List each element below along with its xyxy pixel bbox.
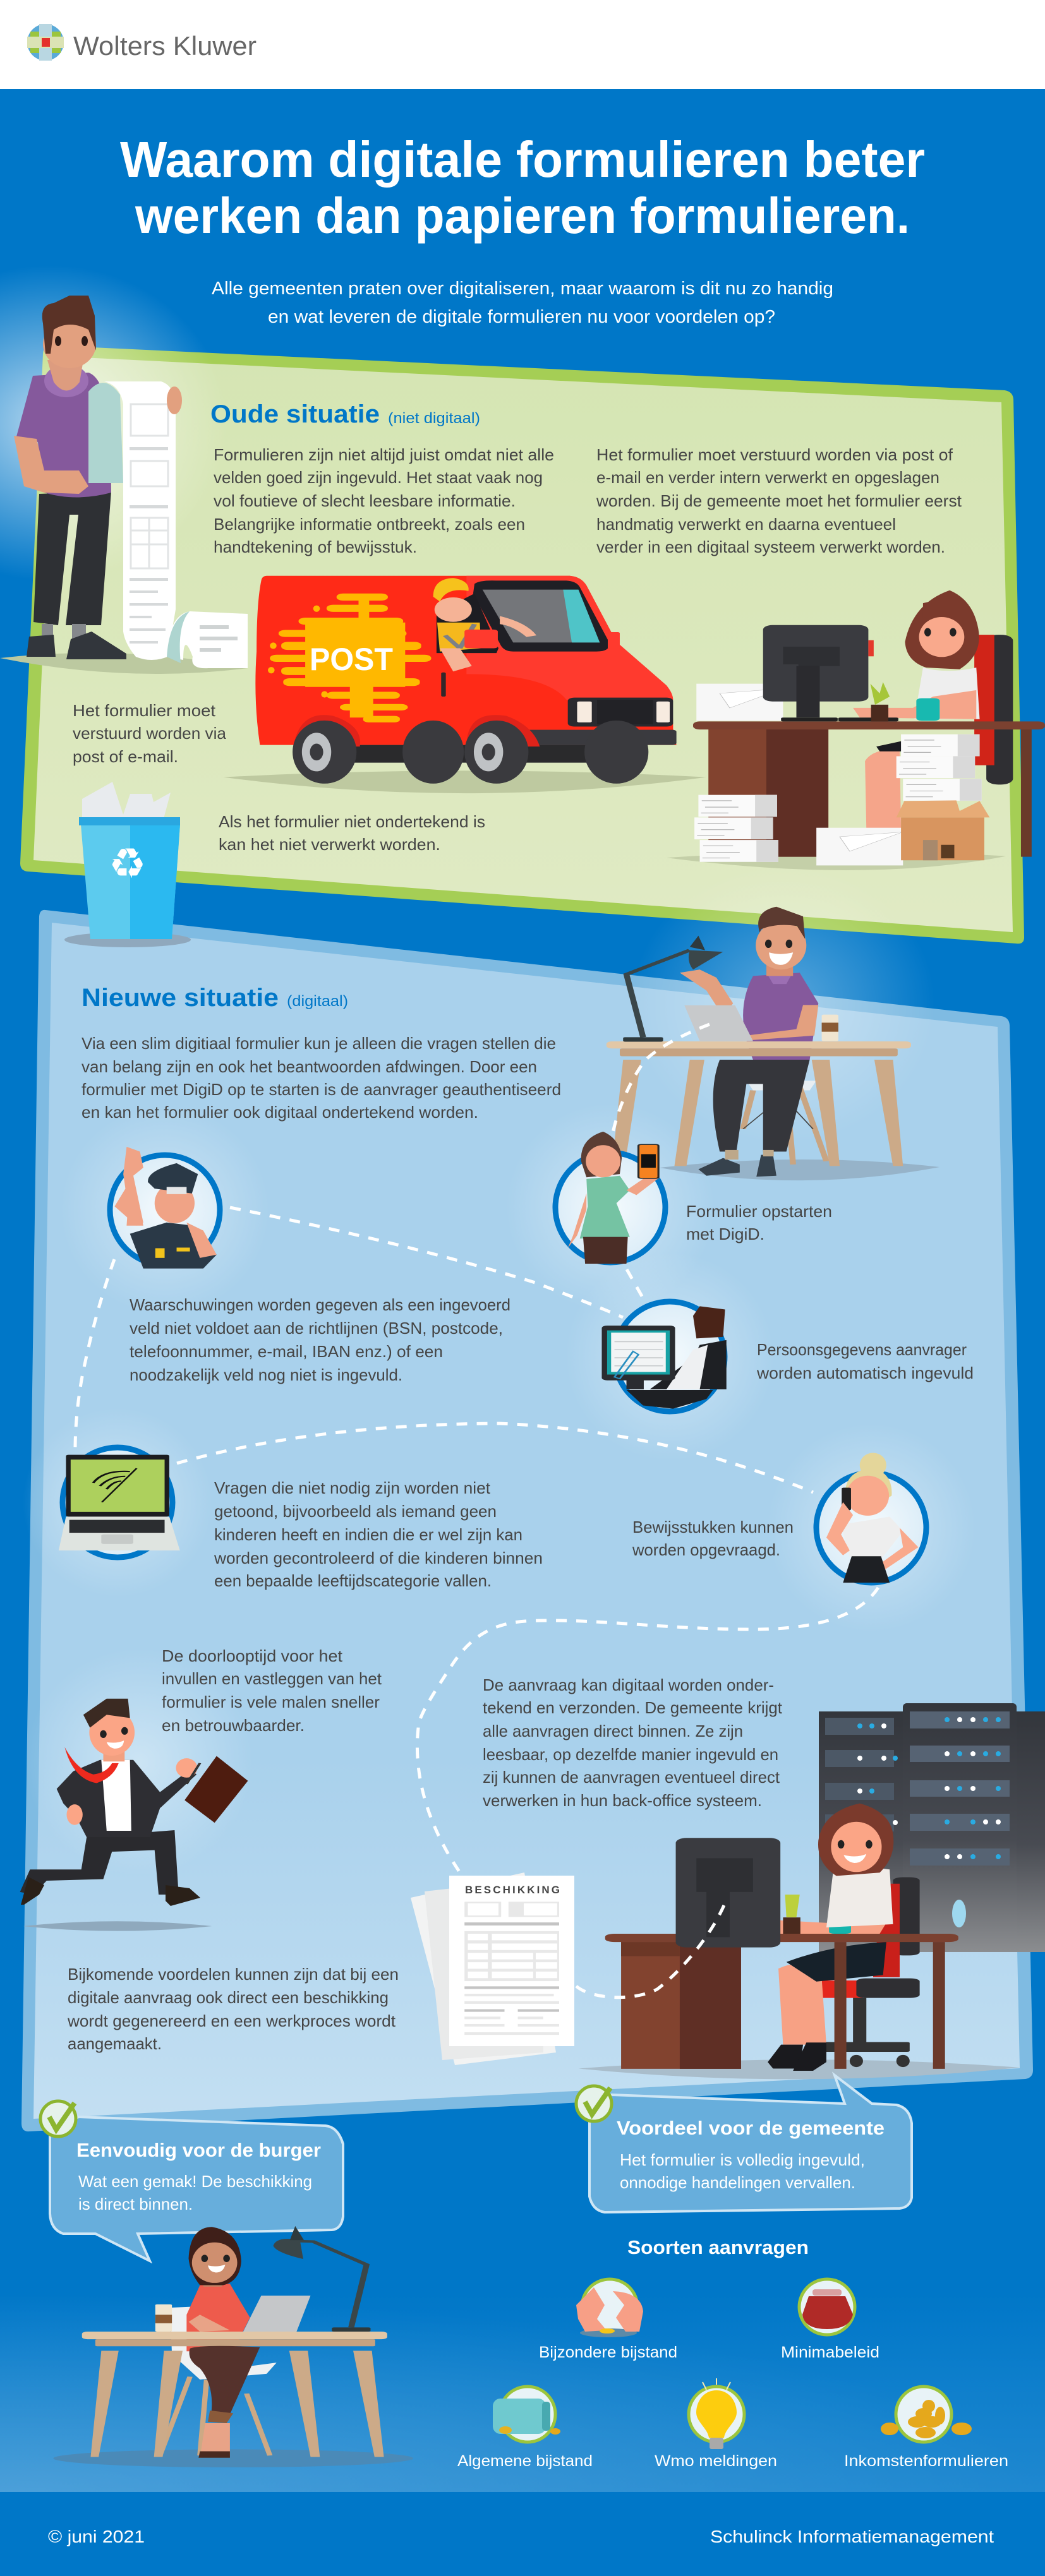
glow behind man with paper: [0, 265, 227, 581]
text: post of e-mail: verder in een digitaal systeem verwerkt worden.: [596, 537, 945, 556]
text: vragen niet getoond: [214, 1478, 543, 1590]
item: bijzondere bijstand: [539, 2279, 677, 2361]
text: bewijsstukken: worden opgevraagd.: [632, 1540, 780, 1559]
text: verstuurd via post of e-mail: [73, 701, 227, 766]
item: wmo meldingen: Wmo meldingen: [655, 2452, 777, 2470]
item: minimabeleid: [781, 2279, 879, 2361]
text: formulier opstarten: met DigiD.: [686, 1225, 764, 1243]
footer: © juni 2021: [48, 2527, 145, 2546]
text: formulieren niet juist: Belangrijke informatie ontbreekt, zoals een: [214, 515, 525, 534]
text: formulieren niet juist: Formulieren zijn niet altijd juist omdat niet alle: [214, 445, 554, 464]
text: doorlooptijd: [162, 1646, 382, 1735]
subtitle: [212, 279, 833, 327]
text: verstuurd via post of e-mail: Het formulier moet: [73, 701, 216, 720]
text: slim digitaal formulier: [82, 1034, 561, 1122]
heading: nieuwe situatie: (digitaal): [287, 993, 348, 1010]
halos behind step circles: [23, 1103, 976, 1876]
logo: Wolters Kluwer: Wolters Kluwer: [73, 31, 257, 61]
text: formulieren niet juist: velden goed zijn ingevuld. Het staat vaak nog: [214, 468, 543, 487]
title: werken dan papieren formulieren.: [135, 188, 910, 244]
text: vragen niet getoond: een bepaalde leeftijdscategorie vallen.: [214, 1571, 492, 1590]
icon: check badge burger: [40, 2101, 76, 2136]
icon: runner shoes: [21, 1877, 200, 1906]
glow behind man at desk: [632, 865, 935, 1143]
icon: recycle bin: [64, 782, 191, 947]
text: bewijsstukken: [632, 1518, 794, 1559]
item: wmo meldingen: [655, 2378, 777, 2470]
step circle: woman with phone: [555, 1132, 665, 1264]
text: doorlooptijd: De doorlooptijd voor het: [162, 1646, 343, 1665]
heading: oude situatie: [210, 400, 480, 428]
item: minimabeleid: Minimabeleid: [781, 2344, 879, 2361]
text: vragen niet getoond: Vragen die niet nodig zijn worden niet: [214, 1478, 491, 1497]
panel: nieuwe situatie: [21, 910, 1033, 2131]
illustration: server racks: [819, 1703, 1045, 1952]
text: waarschuwingen: noodzakelijk veld nog niet is ingevuld.: [130, 1365, 402, 1384]
subtitle: en wat leveren de digitale formulieren nu voor voordelen op?: [268, 307, 775, 327]
text: aanvraag digitaal: tekend en verzonden. De gemeente krijgt: [483, 1698, 783, 1717]
lower background gradient: [0, 2294, 1045, 2492]
callout: voordeel voor de gemeente: onnodige handelingen vervallen.: [620, 2173, 855, 2192]
icon: POST logo splash: [268, 594, 431, 722]
text: aanvraag digitaal: [483, 1675, 783, 1810]
text: doorlooptijd: en betrouwbaarder.: [162, 1716, 305, 1735]
text: aanvraag digitaal: leesbaar, op dezelfde manier ingevuld en: [483, 1745, 778, 1764]
callout: voordeel voor de gemeente: [589, 2075, 912, 2212]
icon: recycle bin: ♻: [109, 839, 146, 888]
shadow under runner: [23, 1921, 212, 1931]
item: inkomstenformulieren: Inkomstenformulieren: [844, 2452, 1008, 2470]
text: post of e-mail: handmatig verwerkt en daarna eventueel: [596, 515, 896, 534]
text: verstuurd via post of e-mail: post of e-mail.: [73, 747, 178, 766]
heading: oude situatie: Oude situatie: [210, 400, 380, 428]
item: algemene bijstand: Algemene bijstand: [457, 2452, 593, 2470]
callout: eenvoudig voor de burger: Wat een gemak! De beschikking: [78, 2172, 312, 2191]
text: niet ondertekend: kan het niet verwerkt worden.: [219, 835, 440, 854]
item: inkomstenformulieren: [844, 2387, 1008, 2470]
text: slim digitaal formulier: van belang zijn en ook het beantwoorden afdwingen. Door een: [82, 1057, 537, 1076]
illustration: running businessman: [20, 1699, 248, 1931]
footer: Schulinck Informatiemanagement: [710, 2527, 994, 2546]
icon: desk lamp: [623, 936, 723, 1041]
callout: voordeel voor de gemeente: Voordeel voor de gemeente: [617, 2117, 885, 2139]
footer: [0, 2492, 1045, 2576]
step circle: person at computer: [601, 1302, 727, 1411]
POST label on van: POST: [310, 642, 393, 677]
text: niet ondertekend: [219, 812, 485, 854]
text: post of e-mail: Het formulier moet verstuurd worden via post of: [596, 445, 953, 464]
text: aanvraag digitaal: verwerken in hun back-office systeem.: [483, 1791, 762, 1810]
callout: voordeel voor de gemeente: Het formulier is volledig ingevuld,: [620, 2150, 865, 2169]
title: Waarom digitale formulieren beter: [120, 131, 925, 188]
lower left background glow: [0, 2294, 1045, 2492]
text: vragen niet getoond: getoond, bijvoorbeeld als iemand geen: [214, 1502, 497, 1521]
text: post of e-mail: worden. Bij de gemeente moet het formulier eerst: [596, 491, 962, 510]
text: waarschuwingen: veld niet voldoet aan de richtlijnen (BSN, postcode,: [130, 1319, 503, 1338]
item: bijzondere bijstand: Bijzondere bijstand: [539, 2344, 677, 2361]
illustration: man at desk with laptop: [607, 907, 939, 1180]
header background: [0, 0, 1045, 89]
text: persoonsgegevens: Persoonsgegevens aanvrager: [757, 1340, 967, 1359]
step circle: officer: [110, 1147, 220, 1269]
illustration: red post van: [223, 576, 706, 793]
item: algemene bijstand: [457, 2387, 593, 2470]
callout: eenvoudig voor de burger: Eenvoudig voor de burger: [76, 2139, 321, 2161]
illustration: woman at desk with laptop: [53, 2226, 413, 2467]
text: formulieren niet juist: [214, 445, 554, 556]
text: formulieren niet juist: handtekening of bewijsstuk.: [214, 537, 417, 556]
step circle: hidden questions laptop: [59, 1447, 180, 1557]
illustration: office worker with paper stacks: [667, 590, 1045, 870]
panel: oude situatie: [20, 345, 1024, 944]
illustration: man with long paper form: [0, 296, 248, 674]
illustration: municipal employee at desk: [579, 1804, 1020, 2079]
text: aanvraag digitaal: alle aanvragen direct binnen. Ze zijn: [483, 1722, 743, 1740]
text: bijkomende voordelen: [67, 1965, 399, 2053]
callout: eenvoudig voor de burger: [50, 2117, 343, 2261]
step connector: dashed white paths: [75, 1024, 878, 1998]
text: persoonsgegevens: [756, 1340, 974, 1382]
icon: logo globe: [27, 24, 64, 61]
text: verstuurd via post of e-mail: verstuurd worden via: [73, 724, 227, 743]
text: bijkomende voordelen: digitale aanvraag ook direct een beschikking: [68, 1988, 389, 2007]
heading: nieuwe situatie: [82, 984, 348, 1012]
step circle: blonde woman on phone: [816, 1453, 926, 1583]
heading: soorten aanvragen: Soorten aanvragen: [627, 2236, 809, 2258]
text: waarschuwingen: telefoonnummer, e-mail, IBAN enz.) of een: [130, 1342, 443, 1361]
text: waarschuwingen: [130, 1295, 510, 1384]
text: doorlooptijd: invullen en vastleggen van het: [162, 1669, 382, 1688]
text: formulieren niet juist: vol foutieve of slecht leesbare informatie.: [214, 491, 516, 510]
text: aanvraag digitaal: De aanvraag kan digitaal worden onder-: [483, 1675, 774, 1694]
heading: nieuwe situatie: Nieuwe situatie: [82, 984, 279, 1012]
heading: oude situatie: (niet digitaal): [388, 410, 480, 427]
text: aanvraag digitaal: zij kunnen de aanvragen eventueel direct: [483, 1768, 780, 1787]
text: formulier opstarten: [686, 1202, 832, 1243]
text: niet ondertekend: Als het formulier niet ondertekend is: [219, 812, 485, 831]
icon: check badge gemeente: [576, 2086, 612, 2121]
text: doorlooptijd: formulier is vele malen sneller: [162, 1692, 380, 1711]
text: vragen niet getoond: kinderen heeft en indien die er wel zijn kan: [214, 1525, 522, 1544]
title: [120, 131, 925, 244]
callout: eenvoudig voor de burger: is direct binnen.: [78, 2195, 193, 2214]
logo: Wolters Kluwer: [27, 24, 257, 61]
text: vragen niet getoond: worden gecontroleerd of die kinderen binnen: [214, 1549, 543, 1567]
text: slim digitaal formulier: en kan het formulier ook digitaal ondertekend worden.: [82, 1103, 478, 1122]
text: waarschuwingen: Waarschuwingen worden gegeven als een ingevoerd: [130, 1295, 510, 1314]
text: bewijsstukken: Bewijsstukken kunnen: [632, 1518, 794, 1537]
subtitle: Alle gemeenten praten over digitaliseren, maar waarom is dit nu zo handig: [212, 279, 833, 299]
text: bijkomende voordelen: aangemaakt.: [68, 2034, 162, 2053]
illustration: beschikking document: BESCHIKKING: [465, 1884, 560, 1896]
illustration: beschikking document: [411, 1872, 574, 2065]
text: persoonsgegevens: worden automatisch ingevuld: [756, 1363, 974, 1382]
text: bijkomende voordelen: wordt gegenereerd en een werkproces wordt: [67, 2011, 396, 2030]
text: slim digitaal formulier: Via een slim digitiaal formulier kun je alleen die vragen stellen die: [82, 1034, 556, 1053]
text: post of e-mail: [596, 445, 962, 556]
text: formulier opstarten: Formulier opstarten: [686, 1202, 832, 1221]
text: slim digitaal formulier: formulier met DigiD op te starten is de aanvrager geauthentiseerd: [82, 1080, 561, 1099]
text: post of e-mail: e-mail en verder intern verwerkt en opgeslagen: [596, 468, 939, 487]
text: bijkomende voordelen: Bijkomende voordelen kunnen zijn dat bij een: [68, 1965, 399, 1984]
